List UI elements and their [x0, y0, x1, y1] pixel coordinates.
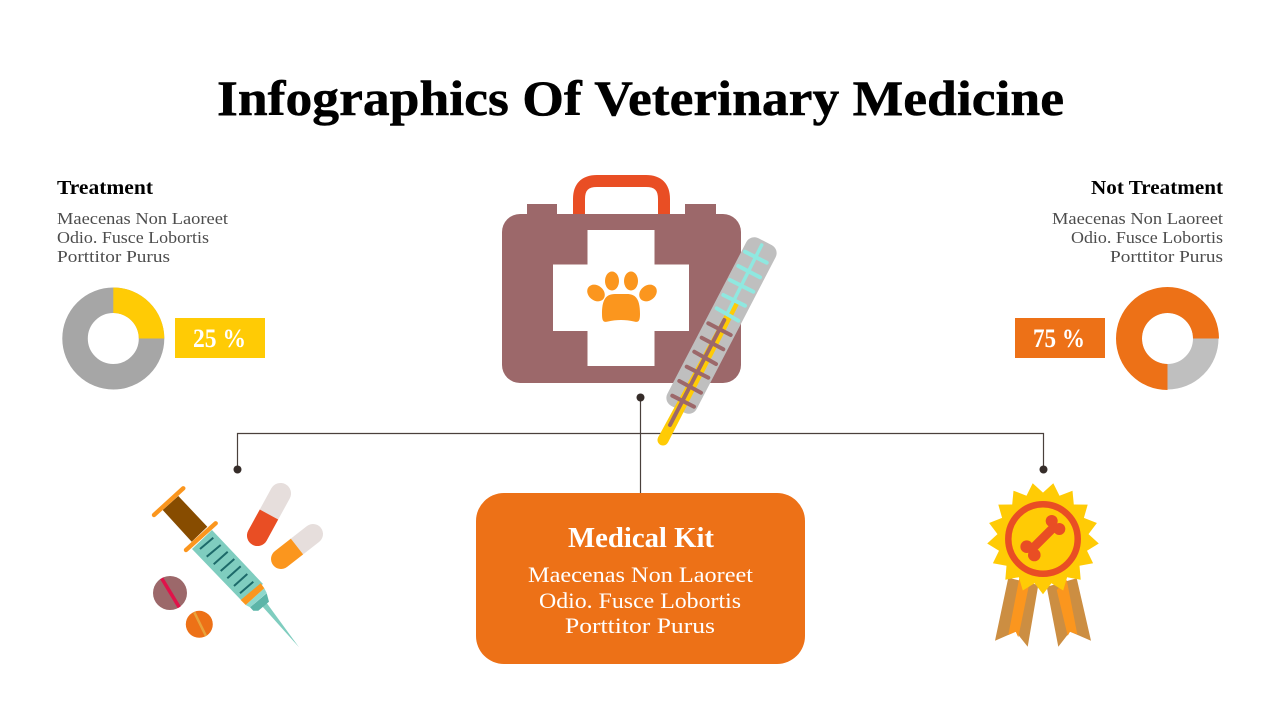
- text block: not treatment: [1052, 209, 1223, 266]
- icon: medical kit: [502, 181, 741, 383]
- value label: 75 percent: 75 %: [1033, 324, 1085, 353]
- pill: orange: [186, 611, 213, 638]
- text block: not treatment: Odio. Fusce Lobortis: [1071, 228, 1223, 247]
- value label: 25 percent: [175, 318, 265, 358]
- syringe: [154, 488, 299, 647]
- capsule: orange: [267, 520, 327, 573]
- heading: not treatment: Not Treatment: [1091, 177, 1223, 199]
- capsule: red: [243, 479, 295, 550]
- text block: medical kit: Odio. Fusce Lobortis: [539, 588, 741, 613]
- text block: treatment: Maecenas Non Laoreet: [57, 209, 228, 228]
- text block: not treatment: Maecenas Non Laoreet: [1052, 209, 1223, 228]
- ribbons: [995, 578, 1091, 647]
- kit latches: [527, 204, 716, 216]
- panel: medical kit callout: [476, 493, 805, 664]
- heading: treatment: Treatment: [57, 177, 153, 199]
- white cross: [553, 230, 689, 366]
- kit body: [502, 214, 741, 383]
- text block: treatment: Porttitor Purus: [57, 247, 170, 266]
- text block: treatment: [57, 209, 228, 266]
- chart: 25 percent donut: [75, 288, 164, 377]
- icon: paw: [584, 272, 660, 322]
- connector lines: [234, 394, 1048, 493]
- title: Infographics Of Veterinary Medicine: [217, 70, 1064, 126]
- icon: award rosette: [987, 483, 1099, 647]
- text block: medical kit: Maecenas Non Laoreet: [528, 562, 753, 587]
- value label: 25 percent: 25 %: [193, 324, 246, 353]
- seal: [987, 483, 1099, 594]
- heading: medical kit: Medical Kit: [568, 522, 714, 554]
- chart: 75 percent donut: [1116, 287, 1219, 390]
- pill: mauve: [153, 576, 187, 610]
- icon: bone: [1020, 515, 1065, 561]
- kit handle: [579, 181, 664, 216]
- icon: syringe and pills: [153, 479, 327, 647]
- panel: treatment: [57, 177, 265, 377]
- value label: 75 percent: [1015, 318, 1105, 358]
- ring: [1008, 504, 1078, 574]
- text block: medical kit: [528, 562, 753, 638]
- text block: treatment: Odio. Fusce Lobortis: [57, 228, 209, 247]
- text block: not treatment: Porttitor Purus: [1110, 247, 1223, 266]
- panel: not treatment: [1015, 177, 1223, 390]
- icon: thermometer: [658, 234, 780, 446]
- text block: medical kit: Porttitor Purus: [565, 613, 715, 638]
